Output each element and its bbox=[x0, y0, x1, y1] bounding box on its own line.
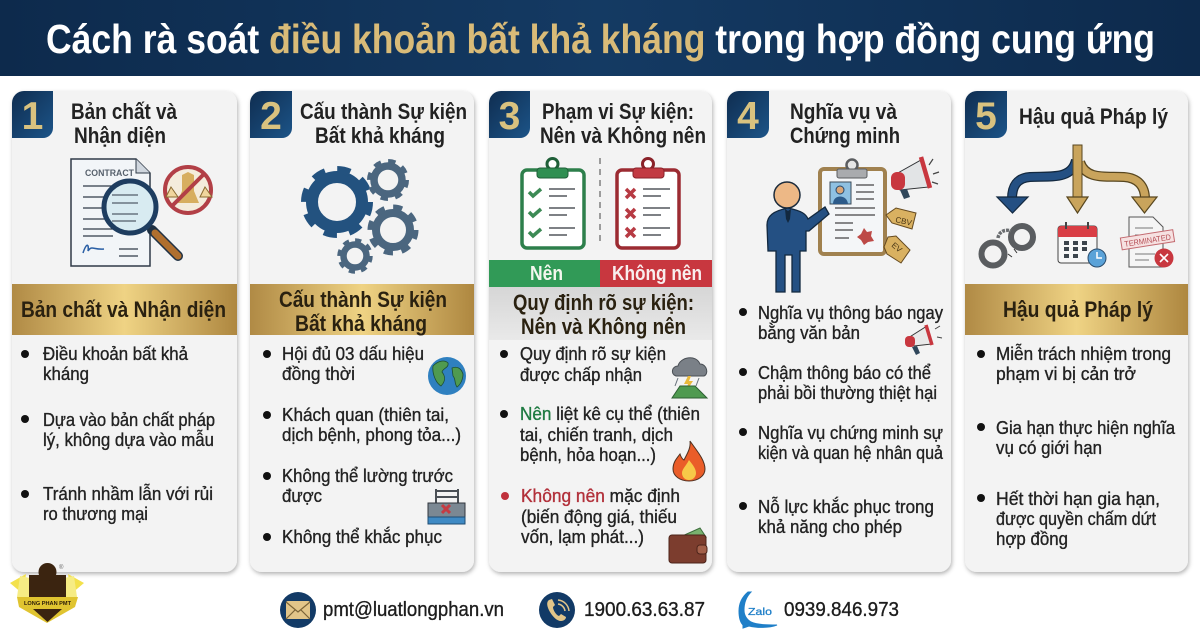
icon: terminated document: TERMINATED bbox=[1124, 233, 1172, 249]
heading 3: Phạm vi Sự kiện: bbox=[542, 99, 694, 124]
logo: Long Phan PMT: LONG PHAN PMT bbox=[24, 601, 72, 607]
heading 4 bbox=[790, 99, 900, 148]
gold band 5 bbox=[965, 284, 1188, 335]
bullets 4: kiện và quan hệ nhân quả bbox=[758, 443, 944, 463]
green and red labels bbox=[489, 260, 712, 287]
icon: contract with magnifier and crossed scales bbox=[71, 159, 212, 266]
gold band 2: Cấu thành Sự kiện bbox=[279, 287, 447, 312]
icon: businessman with clipboard, megaphone and tags bbox=[767, 157, 939, 292]
panel 4: Nghĩa vụ và Chứng minh bbox=[727, 91, 951, 572]
badge 2: 2 bbox=[260, 95, 282, 138]
bullets 1 bbox=[21, 344, 215, 524]
panel 1: Bản chất và Nhận diện bbox=[12, 91, 237, 572]
heading 2: Cấu thành Sự kiện bbox=[300, 99, 467, 124]
logo: Long Phan PMT: ® bbox=[59, 564, 64, 571]
icon: businessman with clipboard, megaphone and tags: CBV bbox=[895, 215, 913, 228]
grey band 3: Quy định rõ sự kiện: bbox=[513, 290, 694, 315]
bullets 2: dịch bệnh, phong tỏa...) bbox=[282, 425, 461, 445]
bullets 2: Không thể khắc phục bbox=[282, 526, 442, 547]
icon: storm bbox=[672, 358, 707, 398]
bullets 5: Miễn trách nhiệm trong bbox=[996, 343, 1171, 364]
bullets 5: Gia hạn thực hiện nghĩa bbox=[996, 418, 1176, 438]
panel 5: Hậu quả Pháp lý bbox=[965, 91, 1188, 572]
badge 2 bbox=[250, 91, 292, 138]
contact: zalo: Zalo bbox=[748, 607, 773, 618]
bullets 3: bệnh, hỏa hoạn...) bbox=[520, 445, 656, 465]
gold band 1 bbox=[12, 284, 237, 335]
bullets 5: phạm vi bị cản trở bbox=[996, 364, 1136, 384]
icon: gears bbox=[305, 162, 416, 272]
bullets 1: Dựa vào bản chất pháp bbox=[43, 410, 215, 430]
bullets 4: Nỗ lực khắc phục trong bbox=[758, 496, 934, 517]
bullets 4: phải bồi thường thiệt hại bbox=[758, 383, 937, 403]
contact: phone bbox=[539, 592, 705, 628]
bullets 4: Chậm thông báo có thể bbox=[758, 363, 931, 383]
bullets 5: hợp đồng bbox=[996, 529, 1068, 549]
icon: red cross clipboard bbox=[617, 158, 679, 248]
panel 3: Phạm vi Sự kiện bbox=[489, 91, 712, 572]
badge 5: 5 bbox=[975, 95, 997, 138]
icon: contract with magnifier and crossed scales: CONTRACT bbox=[85, 168, 134, 179]
bullets 4: bằng văn bản bbox=[758, 322, 860, 343]
bullets 5 bbox=[977, 343, 1176, 549]
icon: calendar with clock bbox=[1058, 222, 1106, 267]
header banner bbox=[0, 0, 1200, 76]
badge 4 bbox=[727, 91, 769, 138]
bullets 3: tai, chiến tranh, dịch bbox=[520, 425, 673, 445]
bullets 2: Khách quan (thiên tai, bbox=[282, 405, 449, 425]
panel 2: Cấu thành Sự kiện bbox=[250, 91, 474, 572]
bullets 2: Hội đủ 03 dấu hiệu bbox=[282, 344, 424, 364]
bullets 1: kháng bbox=[43, 364, 89, 384]
gold band 1: Bản chất và Nhận diện bbox=[21, 297, 226, 322]
bullets 4: khả năng cho phép bbox=[758, 517, 902, 537]
icon: wallet bbox=[669, 528, 707, 563]
bullets 5: được quyền chấm dứt bbox=[996, 509, 1156, 529]
heading 4: Chứng minh bbox=[790, 123, 900, 148]
grey band 3: Nên và Không nên bbox=[521, 314, 686, 339]
bullets 3: Nên liệt kê cụ thể (thiên bbox=[520, 404, 700, 424]
green and red labels: Không nên bbox=[612, 263, 702, 285]
contact: email bbox=[280, 592, 504, 628]
contact: email: pmt@luatlongphan.vn bbox=[323, 598, 504, 621]
bullets 2: đồng thời bbox=[282, 364, 355, 384]
bullets 3: được chấp nhận bbox=[520, 365, 642, 385]
bullets 3: Không nên mặc định bbox=[521, 486, 680, 506]
heading 5: Hậu quả Pháp lý bbox=[1019, 104, 1169, 129]
green and red labels: Nên bbox=[530, 263, 563, 285]
heading 1: Nhận diện bbox=[74, 123, 166, 148]
heading 3: Nên và Không nên bbox=[540, 123, 706, 148]
bullets 1: lý, không dựa vào mẫu bbox=[43, 429, 214, 450]
icon: globe bbox=[428, 357, 466, 395]
heading 3 bbox=[540, 99, 706, 148]
heading 2: Bất khả kháng bbox=[315, 123, 445, 148]
bullets 1: Điều khoản bất khả bbox=[43, 344, 189, 364]
bullets 3: vốn, lạm phát...) bbox=[521, 527, 644, 547]
bullets 2: Không thể lường trước bbox=[282, 466, 453, 486]
heading 1: Bản chất và bbox=[71, 99, 178, 124]
bullets 3: (biến động giá, thiếu bbox=[521, 507, 677, 527]
grey band 3 bbox=[489, 287, 712, 340]
gold band 2: Bất khả kháng bbox=[295, 311, 427, 336]
contact: zalo bbox=[739, 592, 899, 628]
bullets 1: Tránh nhầm lẫn với rủi bbox=[43, 483, 213, 504]
bullets 1: ro thương mại bbox=[43, 504, 148, 524]
bullets 3: Quy định rõ sự kiện bbox=[520, 344, 666, 364]
contact: phone: 1900.63.63.87 bbox=[584, 598, 705, 621]
badge 3: 3 bbox=[499, 95, 520, 138]
bullets 4: Nghĩa vụ thông báo ngay bbox=[758, 303, 943, 323]
gold band 5: Hậu quả Pháp lý bbox=[1003, 297, 1154, 322]
bullets 4 bbox=[739, 303, 944, 537]
heading 4: Nghĩa vụ và bbox=[790, 99, 898, 124]
icon: terminated document bbox=[1120, 217, 1175, 268]
contact: zalo: 0939.846.973 bbox=[784, 598, 899, 621]
badge 3 bbox=[489, 91, 530, 138]
icon: flame bbox=[673, 441, 705, 481]
heading 1 bbox=[71, 99, 178, 148]
bullets 3 bbox=[500, 344, 700, 547]
icon: green checklist clipboard bbox=[522, 158, 584, 248]
badge 5 bbox=[965, 91, 1007, 138]
badge 4: 4 bbox=[737, 95, 759, 138]
heading 2 bbox=[300, 99, 467, 148]
bullets 2: được bbox=[282, 486, 322, 506]
title: Cách rà soát điều khoản bất khả kháng trong hợp đồng cung ứng bbox=[46, 16, 1155, 62]
icon: small megaphone bbox=[905, 325, 942, 355]
badge 1 bbox=[12, 91, 53, 138]
bullets 4: Nghĩa vụ chứng minh sự bbox=[758, 423, 943, 443]
divider bbox=[599, 158, 601, 242]
icon: broken handcuffs bbox=[982, 226, 1033, 266]
icon: flooded barrier bbox=[428, 489, 465, 524]
bullets 5: Hết thời hạn gia hạn, bbox=[996, 489, 1160, 509]
gold band 2 bbox=[250, 284, 474, 336]
logo: Long Phan PMT bbox=[10, 563, 84, 623]
badge 1: 1 bbox=[22, 95, 43, 138]
icon: three branching arrows bbox=[997, 145, 1157, 213]
icon: businessman with clipboard, megaphone and tags: EV bbox=[890, 241, 904, 255]
bullets 2 bbox=[263, 344, 461, 547]
bullets 5: vụ có giới hạn bbox=[996, 438, 1102, 458]
